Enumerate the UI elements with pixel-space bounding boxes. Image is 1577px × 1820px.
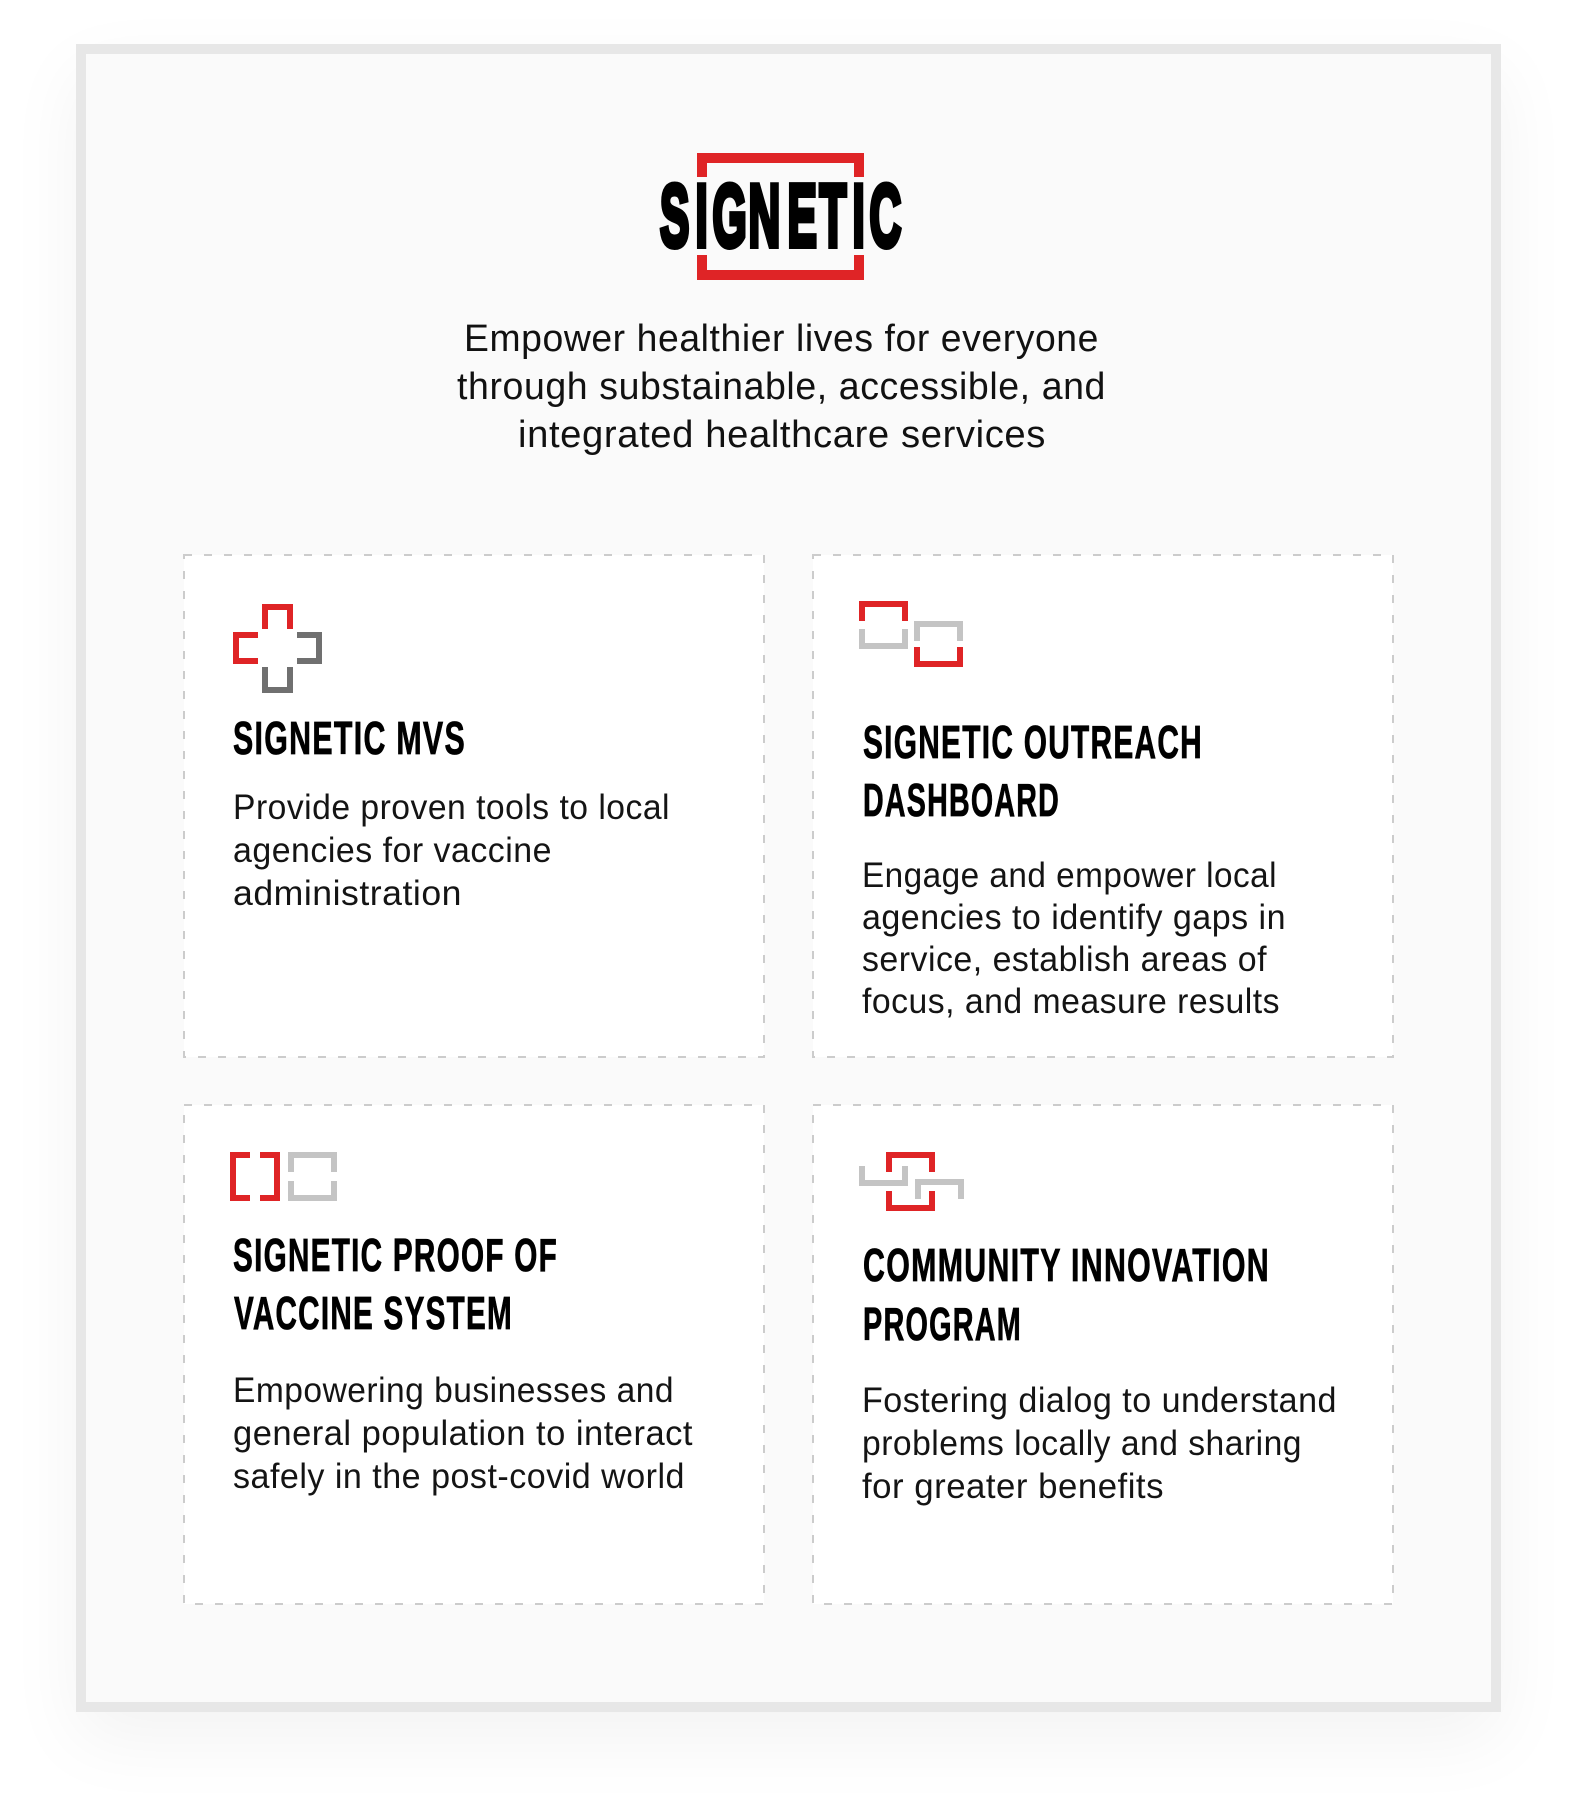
heading: SIGNETIC PROOF OF [233, 1229, 558, 1281]
description [862, 1381, 1337, 1506]
description: for greater benefits [862, 1467, 1164, 1506]
heading: COMMUNITY INNOVATION [863, 1239, 1270, 1291]
heading [863, 716, 1203, 826]
tagline: Empower healthier lives for everyone [464, 318, 1099, 360]
description: focus, and measure results [862, 982, 1280, 1021]
logo: Signetic [660, 158, 901, 275]
heading: DASHBOARD [863, 774, 1060, 826]
panel: Signetic Outreach Dashboard [813, 555, 1393, 1057]
description: Fostering dialog to understand [862, 1381, 1337, 1420]
heading [233, 1229, 558, 1339]
logo wordmark: SIGNETIC [660, 166, 901, 265]
panel: Signetic Proof of Vaccine System [184, 1105, 764, 1604]
panel: Signetic MVS [184, 555, 764, 1057]
card background [184, 1105, 764, 1604]
description: problems locally and sharing [862, 1424, 1302, 1463]
logo bracket: bottom [702, 255, 859, 275]
description: administration [233, 874, 462, 913]
description [233, 1371, 693, 1496]
card background [184, 555, 764, 1057]
icon: cross of brackets [236, 607, 319, 690]
icon: interlocking brackets [862, 1155, 961, 1208]
logo bracket: top [702, 158, 859, 177]
panel: Community Innovation Program [813, 1105, 1393, 1604]
heading: SIGNETIC MVS [233, 712, 466, 764]
tagline: integrated healthcare services [518, 414, 1046, 456]
tagline: through substainable, accessible, and [457, 366, 1106, 408]
heading [863, 1239, 1270, 1350]
description: agencies for vaccine [233, 831, 552, 870]
description [862, 856, 1286, 1021]
card background [813, 555, 1393, 1057]
description: agencies to identify gaps in [862, 898, 1286, 937]
description: Empowering businesses and [233, 1371, 674, 1410]
icon: red brackets and gray box [233, 1155, 334, 1198]
card background [813, 1105, 1393, 1604]
heading: VACCINE SYSTEM [234, 1287, 513, 1339]
description: general population to interact [233, 1414, 693, 1453]
heading: PROGRAM [863, 1298, 1022, 1350]
tagline [457, 318, 1106, 456]
description: Engage and empower local [862, 856, 1277, 895]
description: safely in the post-covid world [233, 1457, 685, 1496]
description: Provide proven tools to local [233, 788, 670, 827]
description [233, 788, 670, 913]
description: service, establish areas of [862, 940, 1267, 979]
icon: two offset boxes [862, 604, 960, 664]
heading: SIGNETIC OUTREACH [863, 716, 1203, 768]
